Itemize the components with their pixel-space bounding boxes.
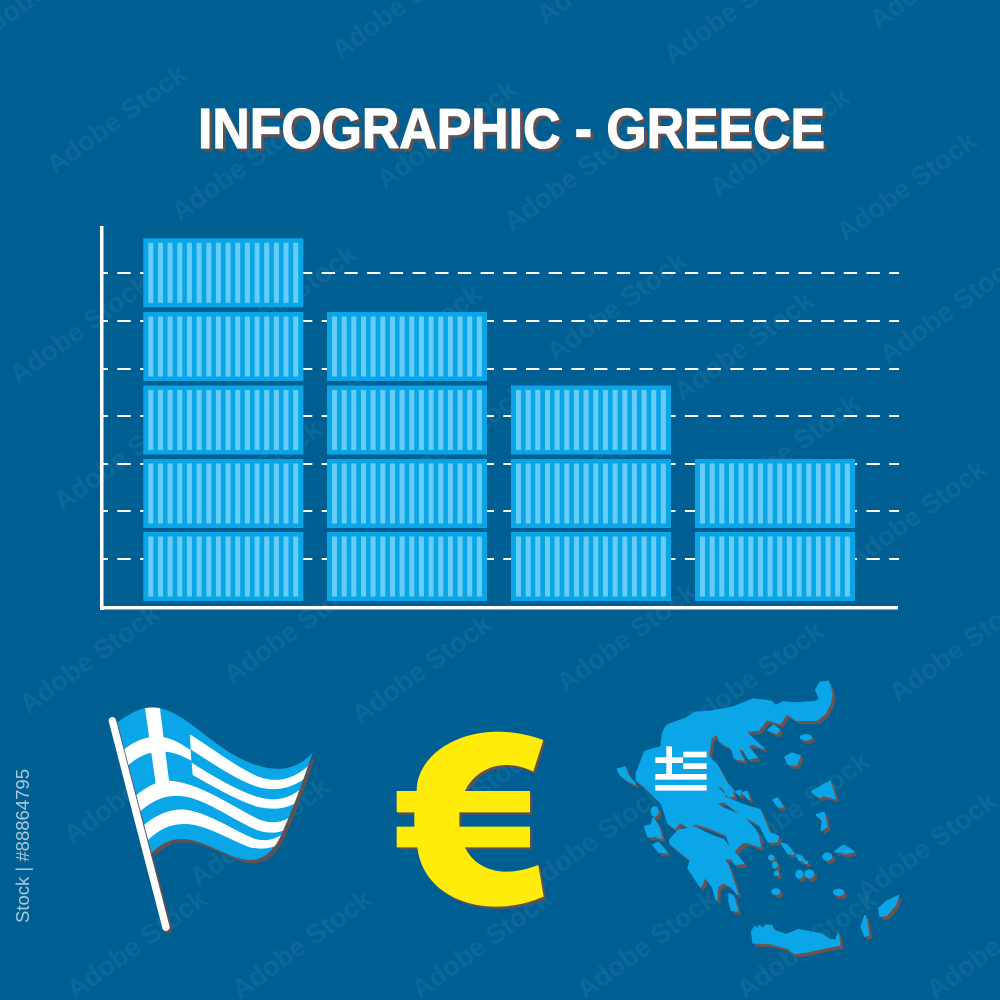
watermark pattern: Adobe Stock bbox=[831, 125, 983, 247]
bar 2: four containers bbox=[327, 312, 487, 601]
watermark pattern: Adobe Stock bbox=[48, 395, 200, 517]
watermark pattern: Adobe Stock bbox=[184, 771, 336, 893]
watermark pattern: Adobe Stock bbox=[841, 453, 993, 575]
watermark pattern: Adobe Stock bbox=[14, 598, 166, 720]
icon: Greek flag bbox=[112, 703, 320, 930]
watermark pattern: Adobe Stock bbox=[336, 278, 488, 400]
watermark pattern: Adobe Stock bbox=[176, 413, 328, 535]
watermark pattern: Adobe Stock bbox=[851, 785, 1000, 907]
watermark pattern: Adobe Stock bbox=[498, 115, 650, 237]
watermark pattern: Adobe Stock bbox=[371, 73, 523, 195]
watermark pattern: Adobe Stock bbox=[704, 81, 856, 203]
watermark pattern: Adobe Stock bbox=[714, 388, 866, 510]
watermark pattern: Adobe Stock bbox=[58, 728, 210, 850]
watermark pattern: Adobe Stock bbox=[211, 238, 363, 360]
chart grid lines and axes bbox=[100, 226, 899, 610]
watermark pattern: Adobe Stock bbox=[346, 608, 498, 730]
watermark pattern: Adobe Stock bbox=[391, 738, 543, 860]
watermark pattern: Adobe Stock bbox=[668, 285, 820, 407]
map of Greece bbox=[618, 682, 901, 956]
watermark pattern: Adobe Stock bbox=[551, 576, 703, 698]
watermark pattern: Adobe Stock bbox=[678, 615, 830, 737]
icon: small flag on map bbox=[655, 746, 707, 791]
watermark pattern: Adobe Stock bbox=[166, 105, 318, 227]
bar 3: three containers bbox=[511, 386, 671, 601]
watermark pattern: Adobe Stock bbox=[218, 568, 370, 690]
bar 4: two containers bbox=[695, 459, 855, 601]
watermark pattern: Adobe Stock bbox=[518, 778, 670, 900]
watermark pattern: Adobe Stock bbox=[4, 268, 156, 390]
bar 1: five containers bbox=[143, 238, 303, 601]
bar chart bbox=[100, 226, 899, 610]
watermark pattern: Adobe Stock bbox=[41, 58, 193, 180]
title: INFOGRAPHIC - GREECE bbox=[198, 97, 825, 161]
icon: euro sign bbox=[397, 732, 546, 909]
watermark pattern: Adobe Stock bbox=[381, 378, 533, 500]
watermark pattern: Adobe Stock bbox=[511, 413, 663, 535]
watermark pattern: Adobe Stock bbox=[541, 245, 693, 367]
stock id vertical label: Stock | #88864795 bbox=[13, 769, 33, 923]
watermark pattern: Adobe Stock bbox=[724, 745, 876, 867]
